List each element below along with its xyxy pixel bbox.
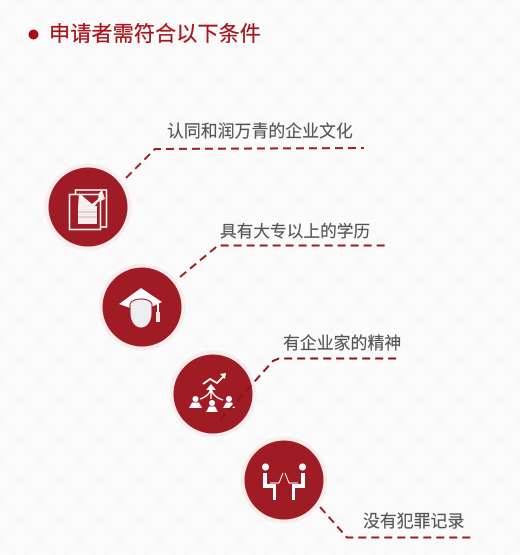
connector line 4: [320, 507, 473, 538]
icon circle 3: team growth: [170, 350, 256, 438]
title: 申请者需符合以下条件: [49, 22, 261, 46]
label: education: 具有大专以上的学历: [220, 222, 370, 241]
label: no criminal record: 没有犯罪记录: [363, 512, 464, 531]
icon circle 4: meeting: [240, 436, 328, 524]
icon circle 2: graduation cap: [98, 264, 186, 350]
label: corporate culture: 认同和润万青的企业文化: [167, 122, 353, 141]
connector line 1: [126, 148, 364, 178]
icon circle 1: documents: [44, 164, 132, 250]
label: entrepreneurship: 有企业家的精神: [283, 334, 401, 353]
connector line 3: [220, 358, 400, 420]
connector line 2: [180, 246, 385, 277]
